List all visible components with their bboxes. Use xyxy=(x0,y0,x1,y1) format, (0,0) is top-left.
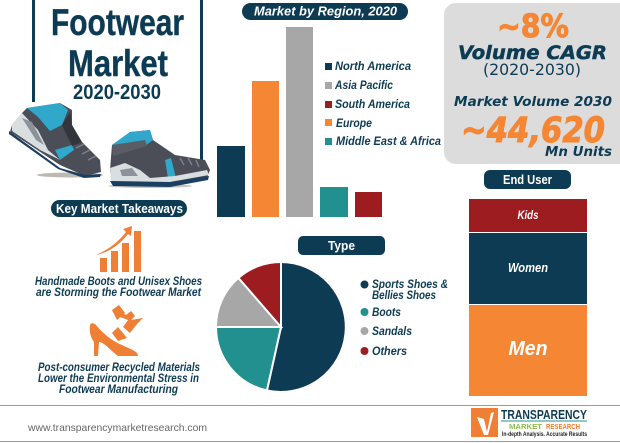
bar chart: market by region xyxy=(217,27,382,217)
text: takeaway one: Handmade Boots and Unisex Shoes xyxy=(35,276,202,288)
heading: end user: End User xyxy=(503,172,552,187)
heading: end user xyxy=(484,170,571,189)
legend: regions: Middle East & Africa xyxy=(336,134,441,148)
legend: type: Others xyxy=(372,344,407,358)
logo: transparency market research: TRANSPARENCY xyxy=(501,407,587,422)
legend: type: Sports Shoes & xyxy=(372,277,448,291)
logo: transparency market research: In-depth Analysis. Accurate Results xyxy=(502,432,588,438)
footer: website url: www.transparencymarketresearch.com xyxy=(27,422,207,434)
panel: key statistics xyxy=(444,3,620,164)
pie chart: type xyxy=(216,262,346,392)
text: takeaway one: are Storming the Footwear Market xyxy=(36,287,202,299)
heading: market by region: Market by Region, 2020 xyxy=(254,4,398,18)
legend: type: Sandals xyxy=(372,324,412,338)
icon: growth chart xyxy=(96,226,141,272)
stat: market volume label: Market Volume 2030 xyxy=(454,94,612,110)
legend: type xyxy=(360,277,448,358)
legend: regions: North America xyxy=(335,59,411,73)
legend: regions: South America xyxy=(335,97,410,111)
stat: CAGR period: (2020-2030) xyxy=(483,60,581,79)
segment: kids: Kids xyxy=(518,208,539,222)
heading: type: Type xyxy=(328,238,355,253)
legend: type: Boots xyxy=(372,305,401,319)
title block: Market xyxy=(68,43,168,84)
legend: regions: Europe xyxy=(336,116,372,130)
icon: right sneaker xyxy=(108,130,210,188)
segment: kids xyxy=(469,199,587,232)
legend: regions: Asia Pacific xyxy=(334,78,393,92)
title block: 2020-2030 xyxy=(73,81,161,104)
text: takeaway two: Post-consumer Recycled Materials xyxy=(38,362,200,374)
logo: transparency market research xyxy=(471,407,588,438)
legend: type: Bellies Shoes xyxy=(372,288,436,302)
icon: left sneaker xyxy=(9,103,103,178)
logo: transparency market research: RESEARCH xyxy=(546,422,580,431)
logo: transparency market research: MARKET xyxy=(509,422,542,431)
segment: women xyxy=(469,233,587,304)
stat: CAGR label: Volume CAGR xyxy=(458,42,607,64)
stacked bar: end user xyxy=(469,199,587,396)
title block xyxy=(32,0,203,160)
legend: regions xyxy=(325,59,441,148)
title block: Footwear xyxy=(51,2,184,43)
text: takeaway two: Lower the Environmental Stress in xyxy=(38,373,199,385)
icon: shoe and recycling hand xyxy=(90,305,143,356)
segment: men: Men xyxy=(508,338,548,360)
segment: women: Women xyxy=(508,260,548,275)
heading: type xyxy=(298,236,385,255)
heading: key market takeaways: Key Market Takeaways xyxy=(56,201,183,216)
text: takeaway two xyxy=(38,362,200,396)
text: takeaway two: Footwear Manufacturing xyxy=(59,384,178,396)
segment: men xyxy=(469,305,587,396)
stat: CAGR value: ~8% xyxy=(497,7,569,45)
text: takeaway one xyxy=(35,276,202,299)
stat: market volume unit: Mn Units xyxy=(545,145,612,160)
